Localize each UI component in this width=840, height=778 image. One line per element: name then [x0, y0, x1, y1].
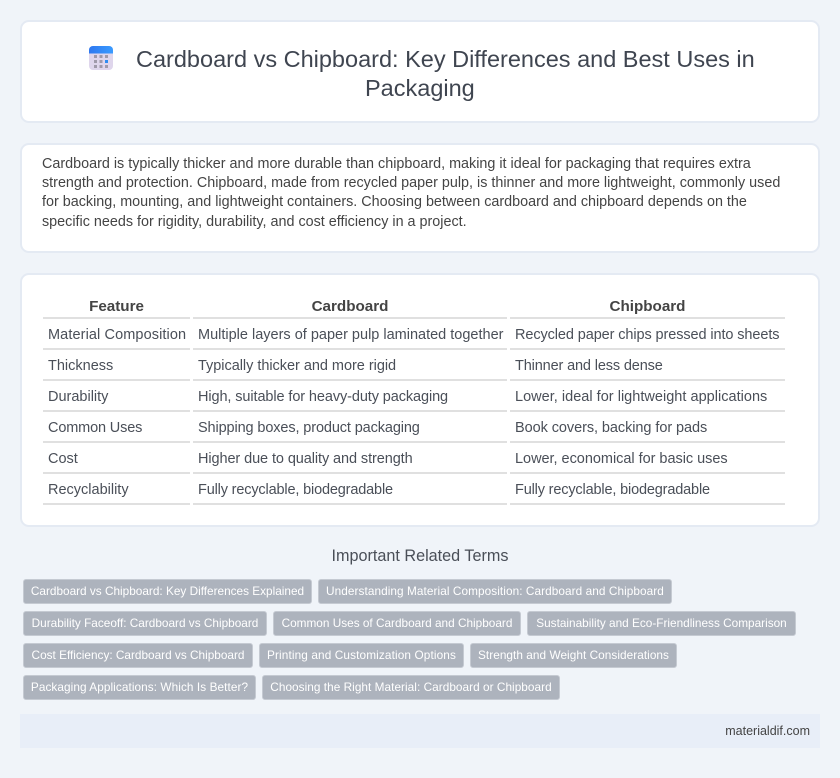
related terms tags: Packaging Applications: Which Is Better? — [31, 680, 248, 694]
related terms tags: Choosing the Right Material: Cardboard or Chipboard — [270, 680, 552, 694]
related terms tags: Cost Efficiency: Cardboard vs Chipboard — [32, 648, 244, 662]
intro text: Cardboard is typically thicker and more durable than chipboard, making it ideal for packaging that requires extra — [42, 156, 751, 172]
related terms tags: Common Uses of Cardboard and Chipboard — [282, 616, 512, 630]
comparison table: Lower, economical for basic uses — [515, 451, 728, 467]
intro text: specific needs for rigidity, durability, and cost efficiency in a project. — [42, 214, 467, 230]
related terms tags: Durability Faceoff: Cardboard vs Chipboard — [32, 616, 258, 630]
intro text: for backing, mounting, and lightweight containers. Choosing between cardboard and chipboard depends on the — [42, 194, 747, 210]
comparison table: Cardboard — [312, 298, 388, 315]
comparison table: Feature — [89, 298, 144, 315]
related terms tags — [23, 579, 796, 700]
related terms tags: Sustainability and Eco-Friendliness Comparison — [536, 616, 787, 630]
comparison table: Thinner and less dense — [515, 358, 663, 374]
footer source text: materialdif.com — [725, 724, 810, 738]
comparison table: Recycled paper chips pressed into sheets — [515, 327, 779, 343]
comparison table: Durability — [48, 389, 108, 405]
comparison table: Typically thicker and more rigid — [198, 358, 396, 374]
comparison table: Common Uses — [48, 420, 142, 436]
icon: calendar — [89, 46, 113, 70]
title: Cardboard vs Chipboard: Key Differences and Best Uses in — [136, 46, 755, 72]
comparison table: Recyclability — [48, 482, 129, 498]
comparison table: Cost — [48, 451, 78, 467]
comparison table — [43, 298, 785, 505]
related terms heading: Important Related Terms — [332, 547, 508, 565]
header panel — [20, 20, 820, 123]
related terms tags: Understanding Material Composition: Cardboard and Chipboard — [326, 584, 664, 598]
comparison table: Material Composition — [48, 327, 186, 343]
comparison table: Book covers, backing for pads — [515, 420, 707, 436]
intro panel — [20, 143, 820, 253]
comparison table: Fully recyclable, biodegradable — [515, 482, 710, 498]
footer bar — [20, 714, 820, 748]
related terms tags: Cardboard vs Chipboard: Key Differences Explained — [31, 584, 304, 598]
title — [136, 46, 755, 101]
comparison table: High, suitable for heavy-duty packaging — [198, 389, 448, 405]
comparison table: Chipboard — [610, 298, 685, 315]
table panel — [20, 273, 820, 527]
comparison table: Thickness — [48, 358, 113, 374]
intro text — [42, 156, 780, 230]
comparison table: Shipping boxes, product packaging — [198, 420, 420, 436]
comparison table: Higher due to quality and strength — [198, 451, 413, 467]
intro text: strength and protection. Chipboard, made from recycled paper pulp, is thinner and more lightweight, commonly used — [42, 175, 780, 191]
comparison table: Fully recyclable, biodegradable — [198, 482, 393, 498]
comparison table: Multiple layers of paper pulp laminated together — [198, 327, 503, 343]
title: Packaging — [365, 75, 475, 101]
related terms tags: Strength and Weight Considerations — [478, 648, 669, 662]
comparison table: Lower, ideal for lightweight applications — [515, 389, 767, 405]
related terms tags: Printing and Customization Options — [267, 648, 456, 662]
